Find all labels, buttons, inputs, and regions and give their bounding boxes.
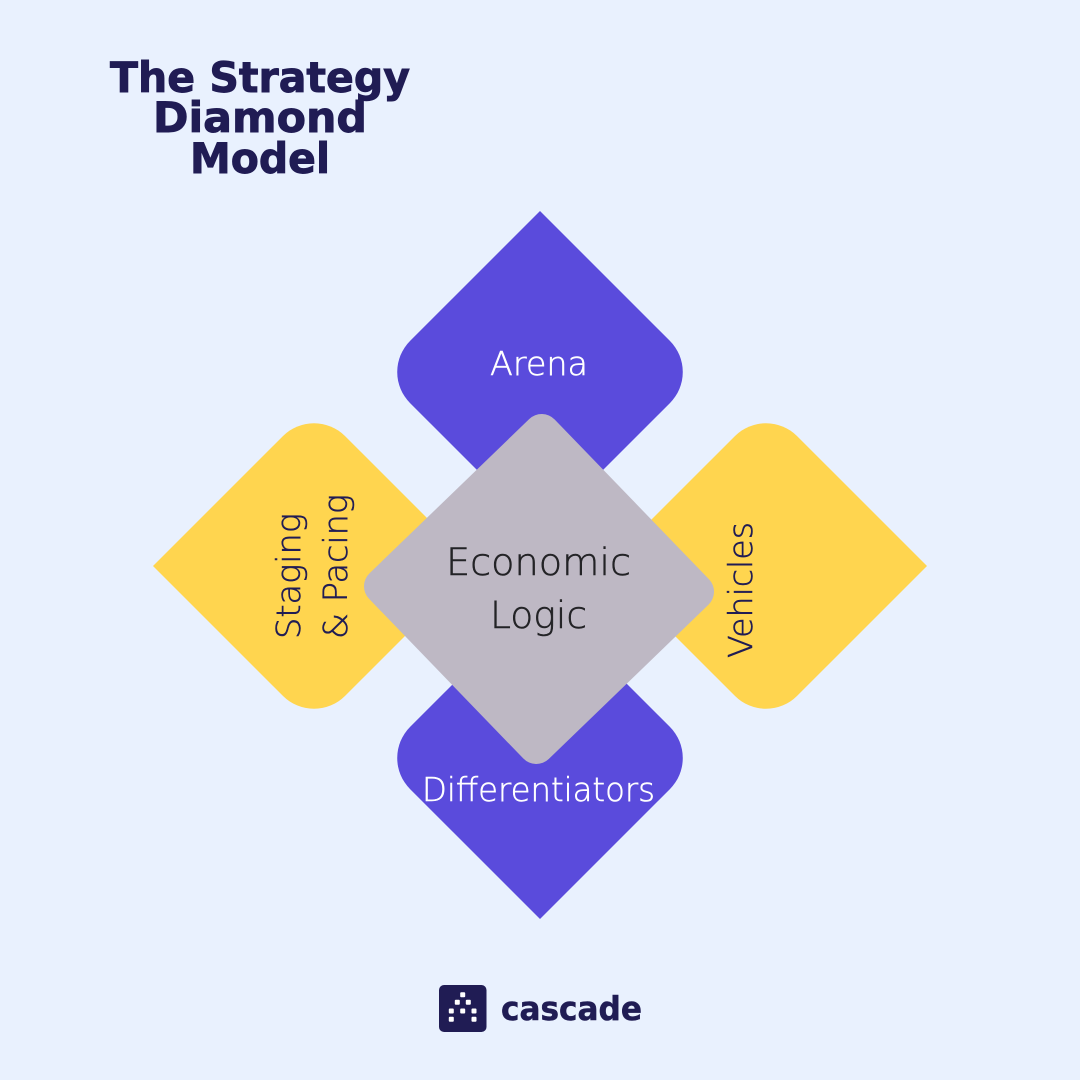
title: The Strategy [110,53,410,102]
label: vehicles: Vehicles [721,522,760,658]
panel: vehicles diamond [623,423,927,709]
icon: cascade mark [439,985,486,1032]
wordmark: cascade [501,989,642,1028]
title [110,53,410,183]
label: economic logic [446,541,631,637]
label: staging and pacing: Staging [269,513,308,639]
label: staging and pacing [269,494,355,639]
panel: staging and pacing diamond [153,423,457,709]
title: Model [190,134,330,183]
label: economic logic: Economic [446,541,631,584]
label: economic logic: Logic [490,594,587,637]
label: staging and pacing: & Pacing [316,494,355,639]
title: Diamond [153,93,367,142]
logo: cascade [439,985,642,1032]
panel: arena diamond [397,211,683,515]
label: differentiators: Differentiators [422,770,655,809]
label: arena: Arena [490,344,588,383]
panel: economic logic diamond [361,411,717,767]
panel: differentiators diamond [397,615,683,919]
